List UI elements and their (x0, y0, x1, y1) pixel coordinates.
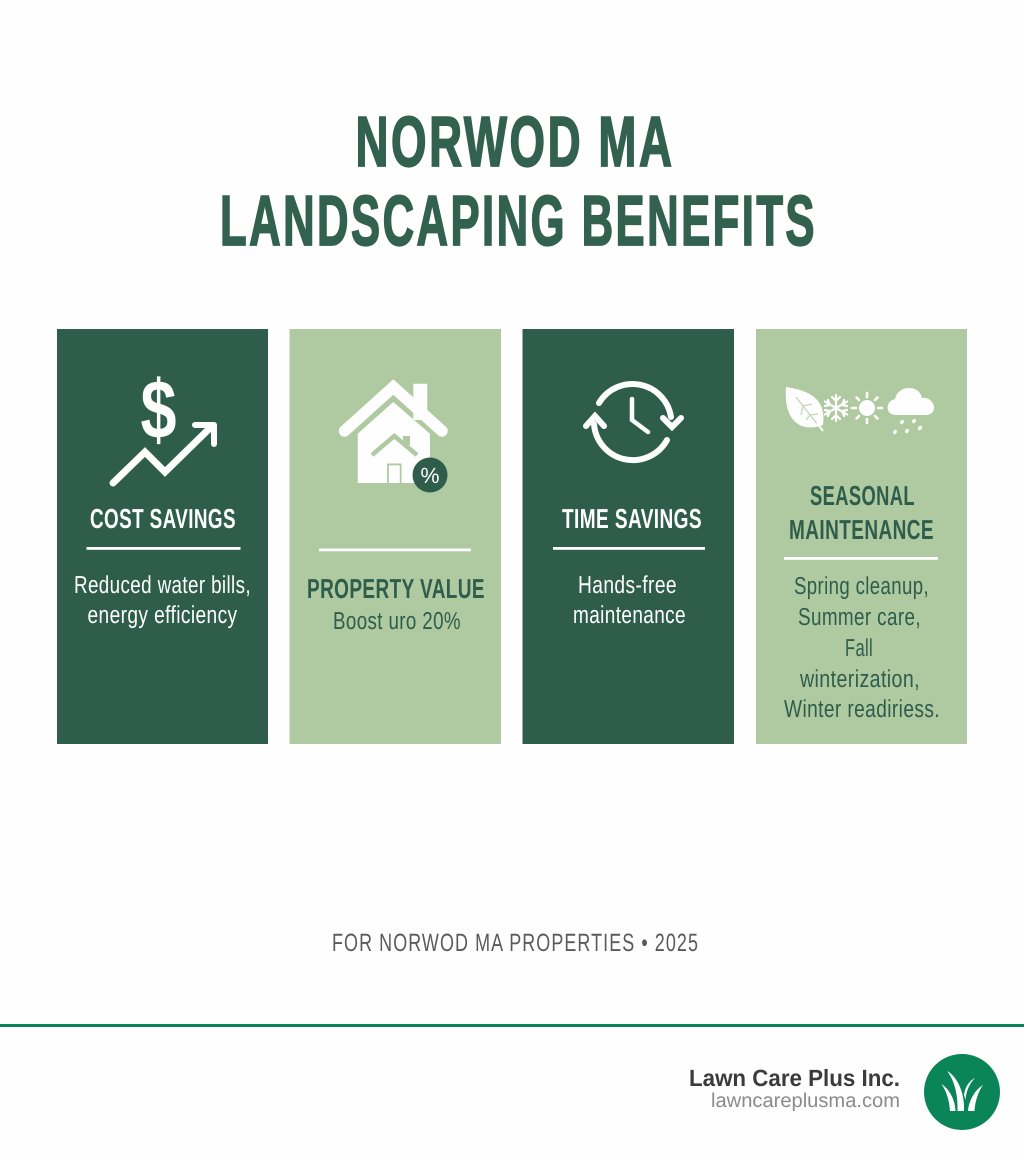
icon: house with percent badge: % (420, 463, 440, 488)
text: time savings detail: maintenance (573, 602, 686, 629)
heading: property value: PROPERTY VALUE (307, 573, 485, 604)
text: seasonal maintenance detail: Summer care, (798, 604, 921, 631)
icon: clock with cycle arrows (586, 384, 681, 460)
text: time savings detail: Hands-free (578, 572, 677, 599)
heading: seasonal maintenance (789, 480, 934, 545)
text: seasonal maintenance detail: Fall (845, 635, 873, 662)
text: cost savings detail: Reduced water bills, (74, 572, 251, 599)
logo: grass in green circle (924, 1054, 1000, 1130)
footer rule (0, 1024, 1024, 1027)
footer: company name and website: lawncareplusma.com (711, 1090, 900, 1112)
icon: dollar and rising arrow (113, 363, 214, 483)
text: seasonal maintenance detail (784, 573, 940, 723)
title (220, 103, 817, 261)
text: property value detail: Boost uro 20% (333, 608, 461, 635)
heading: seasonal maintenance: SEASONAL (810, 480, 915, 511)
caption: FOR NORWOD MA PROPERTIES • 2025 (332, 929, 699, 957)
text: cost savings detail: energy efficiency (88, 602, 238, 629)
icon: rain cloud (888, 388, 934, 435)
icon: leaf (786, 387, 823, 431)
text: cost savings detail (74, 572, 251, 629)
icon: dollar and rising arrow: $ (140, 363, 176, 456)
panel: property value (290, 329, 501, 744)
icon: sun (852, 393, 882, 423)
heading: time savings: TIME SAVINGS (562, 503, 702, 534)
icon: snowflake (825, 395, 847, 421)
panel: seasonal maintenance (756, 329, 967, 744)
footer: company name and website (689, 1065, 900, 1112)
text: seasonal maintenance detail: Winter readiriess. (784, 696, 940, 723)
title: NORWOD MA (356, 103, 674, 182)
text: time savings detail (573, 572, 686, 629)
heading: cost savings: COST SAVINGS (90, 503, 236, 534)
panel: cost savings (57, 329, 268, 744)
heading: seasonal maintenance: MAINTENANCE (789, 514, 934, 545)
text: seasonal maintenance detail: winterization, (799, 666, 920, 693)
text: seasonal maintenance detail: Spring cleanup, (794, 573, 929, 600)
footer: company name and website: Lawn Care Plus Inc. (689, 1065, 900, 1091)
panel: time savings (522, 329, 734, 744)
icon: house with percent badge (344, 384, 448, 492)
